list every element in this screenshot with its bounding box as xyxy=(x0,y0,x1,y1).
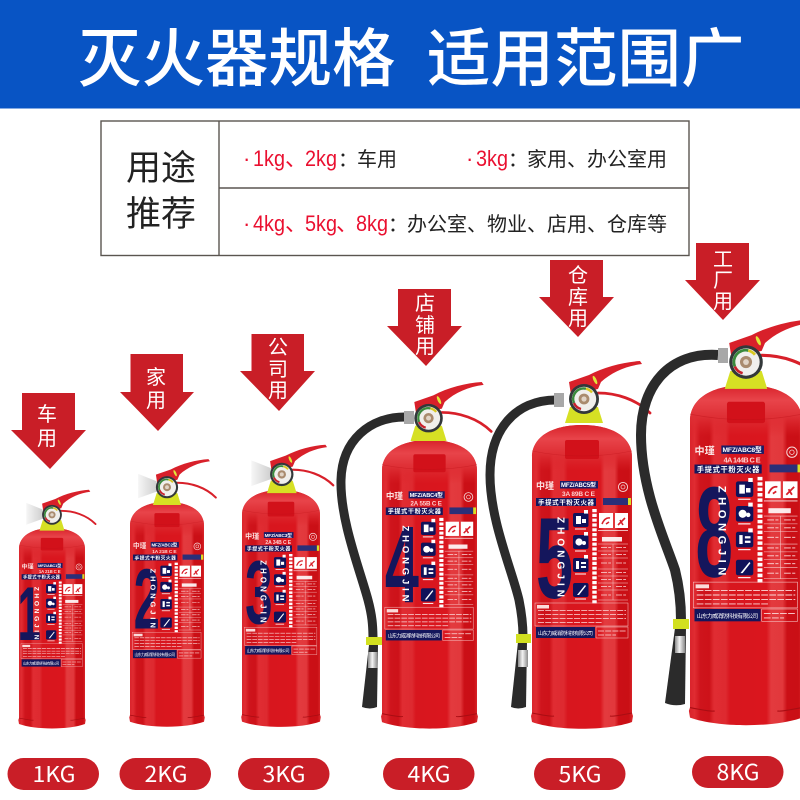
pill: 1KG: 1KG xyxy=(32,757,76,789)
arrow: company use: 公 xyxy=(268,331,288,360)
arrow: factory use: 厂 xyxy=(713,264,733,293)
row: 4kg 5kg 8kg: 、 xyxy=(336,206,358,238)
row: 1kg 2kg: 1kg xyxy=(253,146,285,171)
row: 4kg 5kg 8kg: · xyxy=(243,211,250,236)
extinguisher: 8kg: 8 xyxy=(696,460,733,604)
extinguisher: 3kg: 手提式干粉灭火器 xyxy=(247,545,290,552)
extinguisher: 3kg: ZHONGJIN xyxy=(258,560,267,623)
extinguisher: 3kg: 2A 34B C E xyxy=(265,540,292,546)
arrow: car use xyxy=(11,393,86,469)
extinguisher: 2kg xyxy=(129,459,216,727)
pill: 4KG: 4KG xyxy=(408,757,450,789)
row: 1kg 2kg: · xyxy=(243,146,250,171)
extinguisher: 8kg: 中瑾 xyxy=(694,444,715,457)
extinguisher: 4kg: ZHONGJIN xyxy=(399,526,410,602)
extinguisher: 3kg: 中瑾 xyxy=(245,531,259,540)
extinguisher: 5kg: 5 xyxy=(536,494,573,622)
hose: 8kg xyxy=(641,348,728,705)
row: 1kg 2kg xyxy=(243,141,397,173)
arrow: shop use xyxy=(387,287,462,366)
arrow: home use: 用 xyxy=(146,384,166,413)
arrow: car use: 车 xyxy=(37,398,57,427)
extinguisher: 8kg: 山东力威消防科技有限公司 xyxy=(697,612,759,620)
row: 4kg 5kg 8kg: 、 xyxy=(285,206,307,238)
arrow: factory use xyxy=(685,243,760,320)
extinguisher: 4kg: MFZ/ABC4型 xyxy=(410,491,443,499)
row: 1kg 2kg: 车用 xyxy=(357,143,397,172)
extinguisher: 5kg: 3A 89B C E xyxy=(562,491,596,498)
extinguisher: 1kg: 1 xyxy=(18,572,41,656)
row: 3kg: 家用、办公室用 xyxy=(527,143,667,172)
extinguisher: 2kg: 手提式干粉灭火器 xyxy=(134,554,176,561)
extinguisher: 5kg xyxy=(531,361,650,729)
arrow: factory use: 用 xyxy=(713,285,733,314)
extinguisher: 5kg: ZHONGJIN xyxy=(554,517,566,597)
extinguisher: 1kg: 山东力威消防科技有限公司 xyxy=(23,661,60,666)
pill: 5KG: 5KG xyxy=(558,757,602,789)
extinguisher: 5kg: MFZ/ABC5型 xyxy=(561,481,596,489)
extinguisher: 2kg: 1A 21B C E xyxy=(152,549,177,555)
extinguisher: 3kg: MFZ/ABC3型 xyxy=(265,532,292,538)
extinguisher: 4kg xyxy=(381,382,491,729)
arrow: company use: 司 xyxy=(268,353,288,382)
row: 3kg: ： xyxy=(508,143,528,172)
extinguisher: 3kg: 山东力威消防科技有限公司 xyxy=(247,647,290,653)
pill: 1KG xyxy=(8,757,99,790)
extinguisher: 2kg: 山东力威消防科技有限公司 xyxy=(134,652,175,657)
row: 4kg 5kg 8kg: ： xyxy=(388,208,408,237)
heading: usage recommendation xyxy=(126,140,196,237)
heading: usage recommendation: 推荐 xyxy=(126,186,196,237)
pill: 4KG xyxy=(383,757,474,790)
arrow: company use xyxy=(240,331,315,411)
arrow: shop use: 用 xyxy=(415,330,435,359)
arrow: home use: 家 xyxy=(146,361,166,390)
arrow: home use xyxy=(120,354,194,431)
row: 4kg 5kg 8kg xyxy=(243,206,667,238)
header banner xyxy=(0,0,800,108)
extinguisher: 2kg: ZHONGJIN xyxy=(148,569,157,628)
hose fittings: 4kg xyxy=(366,637,382,668)
extinguisher: 3kg: 3 xyxy=(245,543,273,643)
row: 4kg 5kg 8kg: 5kg xyxy=(305,211,337,236)
extinguisher: 5kg: 手提式干粉灭火器 xyxy=(538,498,594,506)
hose fittings: 5kg xyxy=(516,634,531,667)
pill: 8KG xyxy=(692,755,784,788)
pill: 5KG xyxy=(534,757,626,790)
row: 3kg xyxy=(466,143,667,172)
pill: 3KG: 3KG xyxy=(262,757,306,789)
extinguisher: 1kg: 手提式干粉灭火器 xyxy=(23,573,61,580)
arrow: warehouse use: 库 xyxy=(568,281,588,310)
arrow: warehouse use: 用 xyxy=(568,302,588,331)
row: 3kg: · xyxy=(466,146,473,171)
extinguisher: 4kg: 中瑾 xyxy=(386,490,403,501)
panel: recommended usage table xyxy=(101,121,689,256)
extinguisher: 8kg: 4A 144B C E xyxy=(724,455,761,464)
row: 1kg 2kg: 、 xyxy=(285,141,307,173)
extinguisher: 1kg: MFZ/ABC1型 xyxy=(38,563,61,568)
extinguisher: 8kg: MFZ/ABC8型 xyxy=(722,445,762,454)
arrow: shop use: 铺 xyxy=(415,309,435,338)
extinguisher: 8kg: ZHONGJIN xyxy=(716,486,728,575)
extinguisher: 2kg: 2 xyxy=(134,552,160,647)
extinguisher: 4kg: 山东力威消防科技有限公司 xyxy=(388,633,440,640)
extinguisher: 8kg xyxy=(689,319,800,725)
row: 1kg 2kg: ： xyxy=(338,143,358,172)
extinguisher: 2kg: 中瑾 xyxy=(133,541,147,550)
hose: 4kg xyxy=(341,411,414,708)
extinguisher: 1kg: 1A 21B C E xyxy=(39,569,61,574)
extinguisher: 2kg: MFZ/ABC2型 xyxy=(151,541,178,547)
row: 4kg 5kg 8kg: 4kg xyxy=(253,211,285,236)
extinguisher: 5kg: 山东力威消防科技有限公司 xyxy=(538,629,593,637)
arrow: warehouse use xyxy=(539,259,614,337)
extinguisher: 4kg: 手提式干粉灭火器 xyxy=(388,508,442,516)
extinguisher: 4kg: 2A 55B C E xyxy=(411,501,442,508)
heading: usage recommendation: 用途 xyxy=(126,140,196,191)
extinguisher: 4kg: 4 xyxy=(385,504,419,626)
extinguisher: 8kg: 手提式干粉灭火器 xyxy=(697,465,760,474)
row: 4kg 5kg 8kg: 8kg xyxy=(356,211,388,236)
row: 4kg 5kg 8kg: 办公室、物业、店用、仓库等 xyxy=(407,208,667,237)
extinguisher: 1kg: ZHONGJIN xyxy=(33,587,40,640)
extinguisher: 1kg xyxy=(18,490,96,728)
extinguisher: 5kg: 中瑾 xyxy=(536,480,554,491)
arrow: company use: 用 xyxy=(268,374,288,403)
extinguisher: 3kg xyxy=(241,445,333,727)
extinguisher: 1kg: 中瑾 xyxy=(22,562,34,570)
pill: 2KG xyxy=(120,757,211,790)
row: 1kg 2kg: 2kg xyxy=(305,146,337,171)
pill: 2KG: 2KG xyxy=(144,757,188,789)
pill: 8KG: 8KG xyxy=(716,755,760,787)
arrow: car use: 用 xyxy=(37,422,57,451)
hose: 5kg xyxy=(490,393,564,708)
row: 3kg: 3kg xyxy=(476,146,508,171)
title: left: 灭火器规格 xyxy=(78,8,396,100)
pill: 3KG xyxy=(238,757,330,790)
title: right: 适用范围广 xyxy=(427,8,744,100)
arrow: factory use: 工 xyxy=(713,243,733,272)
hose fittings: 8kg xyxy=(673,619,689,653)
arrow: warehouse use: 仓 xyxy=(568,259,588,288)
arrow: shop use: 店 xyxy=(415,287,435,316)
